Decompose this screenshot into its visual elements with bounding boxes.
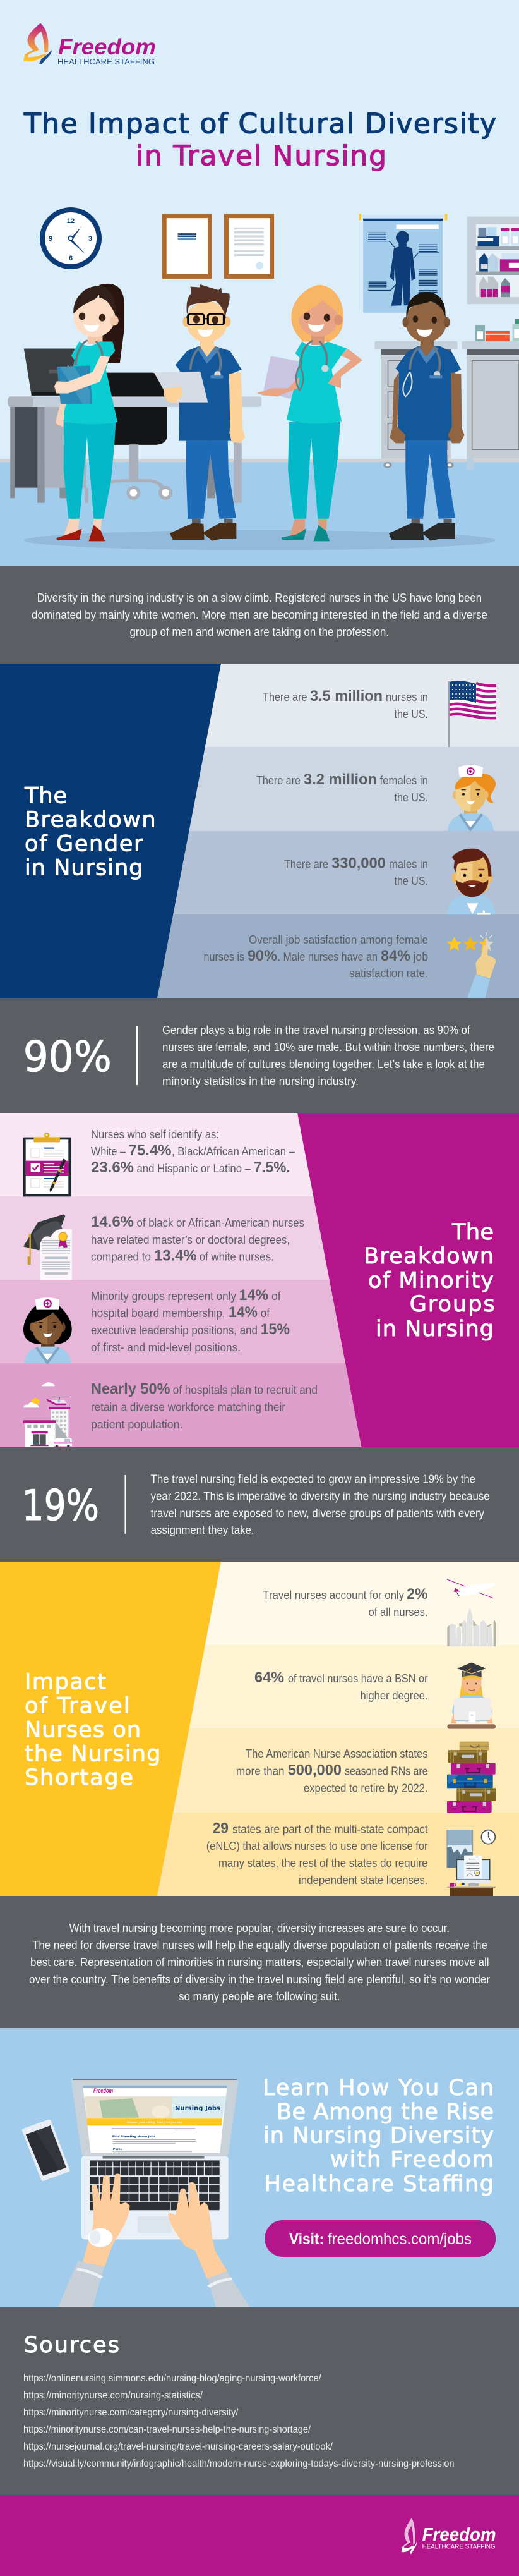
icon: laptop with hands and phone: Find Traveling Nurse Jobs xyxy=(112,2135,155,2139)
heading: impact: Nurses on xyxy=(25,1717,141,1742)
stat: 3.2 million females: There are xyxy=(256,774,301,787)
stat: 64% BSN: higher degree. xyxy=(360,1689,428,1702)
icon: wall clock xyxy=(40,207,102,269)
stat: 2% of nurses: of all nurses. xyxy=(369,1606,428,1619)
panel: intro: dominated by mainly white women. More men are becoming interested in the field and a diverse xyxy=(32,609,487,621)
heading: impact: Shortage xyxy=(25,1765,133,1790)
stat: 500,000 retiring xyxy=(236,1747,428,1795)
stat: job satisfaction: nurses is xyxy=(203,951,244,963)
stat: self identify: 23.6% xyxy=(91,1159,134,1176)
button: visit: Visit: xyxy=(289,2230,324,2248)
icon: american flag xyxy=(448,681,496,747)
heading: minority: in Nursing xyxy=(376,1316,494,1342)
stat: 3.5 million nurses xyxy=(263,688,428,720)
stat: degrees: of black or African-American nurses xyxy=(136,1217,304,1229)
icon: female nurse xyxy=(447,765,496,831)
medicine shelf xyxy=(467,217,519,304)
stat: job satisfaction: Overall job satisfaction among female xyxy=(249,933,428,946)
icon: wall clock: 12 xyxy=(67,217,75,225)
framed certificates xyxy=(162,214,274,279)
panel: closing paragraph: With travel nursing becoming more popular, diversity increases are sure to occur. xyxy=(69,1922,450,1935)
logo: Freedom Healthcare Staffing: HEALTHCARE STAFFING xyxy=(57,58,155,66)
desk and chair xyxy=(8,349,261,503)
icon: graduate at computer xyxy=(447,1663,496,1729)
cabinets and supplies xyxy=(375,319,519,470)
text block xyxy=(162,1024,494,1088)
stat: 3.2 million females: females in xyxy=(380,774,428,787)
stat: 3.5 million nurses: the US. xyxy=(394,708,428,720)
stat: recruit diverse workforce xyxy=(91,1380,318,1431)
anatomy poster xyxy=(359,214,447,313)
source links: https://onlinenursing.simmons.edu/nursing-blog/aging-nursing-workforce/ xyxy=(23,2373,321,2384)
stat: leadership: 14% xyxy=(239,1287,268,1304)
icon: minority nurse xyxy=(23,1297,72,1363)
text block: year 2022. This is imperative to diversity in the nursing industry because xyxy=(151,1490,490,1503)
stat: 64% BSN xyxy=(254,1669,428,1702)
source links: https://minoritynurse.com/can-travel-nurses-help-the-nursing-shortage/ xyxy=(23,2424,311,2435)
title: The Impact of Cultural Diversity xyxy=(23,108,496,140)
heading: gender: of Gender xyxy=(25,832,143,857)
stat: recruit diverse workforce: Nearly 50% xyxy=(91,1380,170,1398)
heading: impact: the Nursing xyxy=(25,1741,160,1766)
nurse 4: dark-skinned man xyxy=(389,292,465,541)
stat: 330,000 males xyxy=(284,854,428,887)
heading: call to action: Be Among the Rise xyxy=(277,2099,494,2125)
heading: minority: Groups xyxy=(410,1292,495,1317)
stat: 2% of nurses: 2% xyxy=(407,1586,428,1603)
icon: wall clock: 3 xyxy=(88,235,92,243)
icon: laptop with hands and phone: Nursing Jobs xyxy=(175,2105,220,2112)
panel: header xyxy=(0,0,519,566)
text block xyxy=(151,1473,490,1536)
panel: footer xyxy=(0,2495,519,2576)
panel: 90% stat xyxy=(0,998,519,1113)
stat: 500,000 retiring: The American Nurse Association states xyxy=(246,1747,428,1760)
icon: hospital xyxy=(23,1382,72,1448)
stat: 2% of nurses: Travel nurses account for only xyxy=(263,1589,404,1601)
icon: wall clock: 9 xyxy=(49,235,52,243)
stat: degrees: of white nurses. xyxy=(200,1250,274,1263)
stat: multi-state compact xyxy=(206,1820,428,1886)
icon: white butterfly flame xyxy=(402,2518,417,2554)
stat: multi-state compact: many states, the rest of the states do require xyxy=(218,1857,428,1869)
heading: gender: The xyxy=(24,784,67,809)
stat: recruit diverse workforce: retain a diverse workforce matching their xyxy=(91,1400,285,1413)
hero illustration xyxy=(0,214,519,550)
heading: gender xyxy=(24,784,155,881)
floor xyxy=(0,462,519,566)
text block: travel nurses are exposed to new, diverse groups of patients with every xyxy=(151,1507,484,1519)
stat: recruit diverse workforce: patient population. xyxy=(91,1418,183,1431)
logo: Freedom Healthcare Staffing: Freedom xyxy=(58,35,156,59)
stat: multi-state compact: 29 xyxy=(213,1820,229,1837)
heading: minority: Breakdown xyxy=(364,1244,494,1269)
stat: 64% BSN: 64% xyxy=(254,1669,284,1686)
stat: self identify: White – xyxy=(91,1145,126,1158)
stat: self identify: Nurses who self identify as: xyxy=(91,1128,219,1141)
stat: 500,000 retiring: more than xyxy=(236,1765,284,1777)
source links xyxy=(23,2373,455,2469)
stat: multi-state compact: (eNLC) that allows nurses to use one license for xyxy=(206,1840,428,1852)
stat: job satisfaction: job xyxy=(413,951,428,963)
nurse 2: man with tablet xyxy=(154,284,245,541)
stat: leadership: of xyxy=(271,1290,282,1303)
stat: degrees: have related master’s or doctoral degrees, xyxy=(91,1234,290,1246)
text block: The travel nursing field is expected to grow an impressive 19% by the xyxy=(151,1473,475,1485)
big number 19%: 19% xyxy=(22,1481,99,1530)
stat: multi-state compact: states are part of the multi-state compact xyxy=(232,1823,428,1835)
panel: intro xyxy=(0,566,519,664)
text block: are a multitude of cultures blending together. Let’s take a look at the xyxy=(162,1058,485,1071)
stat: leadership: executive leadership positions, and xyxy=(91,1324,258,1337)
logo: footer xyxy=(402,2518,496,2554)
stat: 330,000 males: There are xyxy=(284,858,328,871)
heading: sources: Sources xyxy=(24,2333,119,2358)
stat: job satisfaction: 90% xyxy=(248,947,277,964)
heading: minority: The xyxy=(451,1220,494,1245)
text block: nurses are female, and 10% are male. But within those numbers, there xyxy=(162,1041,494,1054)
heading: gender: in Nursing xyxy=(25,856,143,881)
stat: leadership: 14% xyxy=(229,1304,258,1321)
title: in Travel Nursing xyxy=(136,140,386,173)
heading: minority xyxy=(364,1220,495,1342)
text block: assignment they take. xyxy=(151,1524,254,1536)
heading: impact: of Travel xyxy=(25,1694,130,1719)
heading: call to action: with Freedom xyxy=(330,2148,494,2173)
icon: laptop with hands and phone: Freedom xyxy=(93,2087,113,2094)
stat: 330,000 males: the US. xyxy=(394,875,428,887)
panel: call to action xyxy=(0,2028,519,2307)
icon: graduation cap and diploma xyxy=(23,1214,72,1280)
source links: https://minoritynurse.com/category/nursing-diversity/ xyxy=(23,2407,239,2418)
logo: footer: Freedom xyxy=(422,2525,496,2545)
stat: 2% of nurses xyxy=(263,1586,428,1619)
stat: 330,000 males: 330,000 xyxy=(331,854,386,872)
stat: job satisfaction xyxy=(203,933,428,980)
panel: 19% stat xyxy=(0,1447,519,1562)
big number 90%: 90% xyxy=(23,1032,112,1081)
stat: 3.2 million females xyxy=(256,771,428,804)
button: visit: freedomhcs.com/jobs xyxy=(328,2230,472,2248)
stat: leadership: of first- and mid-level positions. xyxy=(91,1341,241,1354)
panel: closing paragraph: best care. Representation of minorities in nursing matters, especially when travel nurses move all xyxy=(30,1956,489,1969)
panel: breakdown of minority groups xyxy=(0,1113,519,1448)
stat: 3.5 million nurses: nurses in xyxy=(386,691,428,703)
icon: laptop with hands and phone: Answer your calling. Find your journey. xyxy=(127,2121,182,2125)
stat: degrees: 13.4% xyxy=(154,1248,197,1264)
panel: closing paragraph: The need for diverse travel nurses will help the equally diverse population of patients receive the xyxy=(32,1939,487,1952)
floor shadow xyxy=(24,530,496,550)
stat: leadership: hospital board membership, xyxy=(91,1307,225,1320)
stat: self identify: and Hispanic or Latino – xyxy=(136,1162,251,1175)
heading: call to action: Healthcare Staffing xyxy=(264,2172,494,2197)
heading: call to action: in Nursing Diversity xyxy=(263,2123,494,2149)
panel: intro: group of men and women are taking on the profession. xyxy=(130,626,389,638)
stat: leadership: 15% xyxy=(261,1321,290,1338)
heading: call to action: Learn How You Can xyxy=(263,2075,494,2101)
stat: degrees: compared to xyxy=(91,1250,151,1263)
icon: laptop with hands and phone: Paris xyxy=(113,2148,122,2151)
panel: closing paragraph: over the country. The benefits of diversity in the travel nursing field are plentiful, so it’s no wonder xyxy=(29,1973,490,1986)
stat: 500,000 retiring: expected to retire by 2022. xyxy=(304,1782,428,1795)
stat: 64% BSN: of travel nurses have a BSN or xyxy=(288,1672,428,1685)
panel: closing paragraph xyxy=(0,1896,519,2028)
icon: butterfly flame xyxy=(23,23,52,64)
heading: call to action xyxy=(263,2075,494,2197)
stat: leadership xyxy=(91,1287,290,1354)
stat: 3.5 million nurses: 3.5 million xyxy=(310,688,383,705)
icon: male nurse xyxy=(447,849,496,914)
nurse 1: woman with folder xyxy=(54,284,124,541)
title xyxy=(23,108,496,173)
icon: suitcase stack xyxy=(447,1742,496,1813)
logo: Freedom Healthcare Staffing xyxy=(23,23,156,66)
icon: office desk with license xyxy=(447,1830,496,1899)
stat: 500,000 retiring: 500,000 xyxy=(288,1762,342,1778)
panel: breakdown of gender xyxy=(0,664,519,998)
text block: Gender plays a big role in the travel nursing profession, as 90% of xyxy=(162,1024,471,1036)
logo: footer: HEALTHCARE STAFFING xyxy=(422,2544,496,2551)
icon: plane over skyline xyxy=(447,1579,496,1646)
stat: job satisfaction: 84% xyxy=(381,947,410,964)
stat: self identify: 75.4% xyxy=(129,1142,172,1159)
stat: degrees: 14.6% xyxy=(91,1213,134,1230)
text block: minority statistics in the nursing industry. xyxy=(162,1075,359,1088)
heading: impact: Impact xyxy=(25,1670,106,1695)
stat: 3.5 million nurses: There are xyxy=(263,691,307,703)
nurse 3: blonde woman with clipboard xyxy=(256,285,362,541)
panel: sources xyxy=(0,2307,519,2495)
stat: multi-state compact: independent state licenses. xyxy=(299,1874,428,1886)
heading: minority: of Minority xyxy=(368,1268,494,1293)
stat: job satisfaction: . Male nurses have an xyxy=(278,951,378,963)
stat: job satisfaction: satisfaction rate. xyxy=(349,967,428,980)
stat: 330,000 males: males in xyxy=(389,858,428,871)
heading: impact xyxy=(25,1670,160,1790)
stat: self identify: , Black/African American – xyxy=(172,1145,295,1158)
stat: 3.2 million females: the US. xyxy=(394,791,428,804)
icon: laptop with hands and phone xyxy=(24,2079,250,2307)
stat: 500,000 retiring: seasoned RNs are xyxy=(345,1765,428,1777)
icon: star rating with hand xyxy=(447,932,496,998)
icon: wall clock: 6 xyxy=(69,255,73,262)
panel: closing paragraph: so many people are following suit. xyxy=(179,1990,340,2003)
source links: https://minoritynurse.com/nursing-statistics/ xyxy=(23,2390,203,2401)
stat: leadership: of xyxy=(261,1307,270,1320)
button: visit xyxy=(265,2220,496,2257)
stat: self identify xyxy=(91,1128,295,1176)
source links: https://visual.ly/community/infographic/health/modern-nurse-exploring-todays-diversity-nursing-profession xyxy=(23,2458,455,2469)
stat: degrees xyxy=(91,1213,304,1264)
panel: impact of travel nurses xyxy=(0,1562,519,1899)
stat: 3.2 million females: 3.2 million xyxy=(304,771,377,788)
stat: recruit diverse workforce: of hospitals plan to recruit and xyxy=(173,1384,318,1397)
stat: self identify: 7.5%. xyxy=(254,1159,290,1176)
panel: intro: Diversity in the nursing industry is on a slow climb. Registered nurses in the US have long been xyxy=(37,592,482,604)
icon: checklist clipboard xyxy=(23,1133,71,1196)
heading: gender: Breakdown xyxy=(25,808,155,833)
source links: https://nursejournal.org/travel-nursing/travel-nursing-careers-salary-outlook/ xyxy=(23,2441,333,2452)
stat: leadership: Minority groups represent only xyxy=(91,1290,236,1303)
